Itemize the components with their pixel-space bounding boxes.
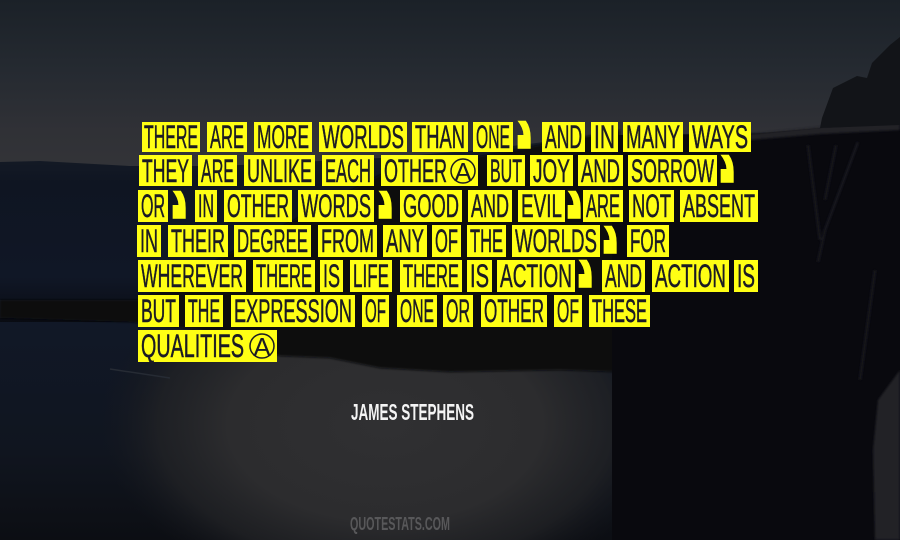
line 2: BUT [490, 153, 522, 189]
line 3: , [372, 185, 398, 287]
line 3: , [561, 185, 587, 287]
line 4: FOR [630, 223, 666, 259]
line 2: SORROW [631, 153, 714, 189]
line 4 [137, 220, 669, 322]
line 6: OF [557, 293, 579, 329]
line 5: THERE [256, 258, 312, 294]
line 6: ONE [400, 293, 434, 329]
line 1: ARE [210, 119, 244, 155]
line 6: OF [365, 293, 386, 329]
line 5: AND [605, 258, 642, 294]
line 3: EVIL [521, 188, 562, 224]
sky [0, 0, 900, 175]
line 2: THEY [142, 153, 189, 189]
line 6: OR [446, 293, 470, 329]
rock summit [820, 37, 900, 128]
icon: anarchy full stop: A [454, 157, 472, 187]
cliff ledge [750, 123, 900, 140]
line 7: QUALITIES [141, 328, 244, 364]
water reflection [90, 250, 650, 540]
icon: anarchy full stop: A [253, 332, 271, 362]
line 4: THE [470, 223, 503, 259]
line 5: , [572, 254, 598, 356]
line 6: EXPRESSION [234, 293, 352, 329]
line 1: THERE [144, 119, 198, 155]
line 4: ANY [386, 223, 424, 259]
lower right rock [873, 370, 900, 540]
line 2: AND [581, 153, 620, 189]
line 5: ACTION [655, 258, 726, 294]
line 3: GOOD [403, 188, 459, 224]
line 2: UNLIKE [247, 153, 312, 189]
line 2: ARE [201, 153, 234, 189]
line 1: THAN [415, 119, 465, 155]
line 4: WORLDS [515, 223, 597, 259]
line 3: OTHER [227, 188, 289, 224]
line 1 [142, 115, 751, 217]
line 3: ABSENT [683, 188, 755, 224]
line 6: THESE [592, 293, 647, 329]
line 2: EACH [325, 153, 371, 189]
line 3: ARE [586, 188, 620, 224]
line 1: , [511, 115, 537, 217]
line 5: LIFE [353, 258, 389, 294]
cliff [612, 124, 900, 540]
quote text block [137, 115, 758, 364]
line 2 [139, 149, 740, 251]
watermark: QUOTESTATS.COM [350, 514, 450, 534]
line 5: ACTION [500, 258, 572, 294]
line 5 [138, 254, 758, 356]
waterfall streaks [808, 142, 875, 380]
line 3: AND [471, 188, 509, 224]
line 3: OR [141, 188, 165, 224]
line 6: THE [188, 293, 220, 329]
water [0, 322, 640, 540]
line 3: , [166, 185, 192, 287]
line 2: JOY [533, 153, 570, 189]
line 4: OF [435, 223, 458, 259]
line 6: BUT [141, 293, 176, 329]
line 5: WHEREVER [141, 258, 243, 294]
line 3: NOT [632, 188, 671, 224]
water streak [110, 369, 170, 378]
line 6: OTHER [484, 293, 544, 329]
line 3 [138, 185, 758, 287]
line 4: , [597, 220, 623, 322]
line 3: IN [198, 188, 214, 224]
line 5: IS [323, 258, 340, 294]
line 4: DEGREE [237, 223, 308, 259]
line 1: IN [594, 119, 615, 155]
author attribution: JAMES STEPHENS [351, 399, 474, 425]
line 6 [138, 293, 650, 329]
line 4: FROM [321, 223, 374, 259]
line 5: THERE [403, 258, 459, 294]
line 1: MANY [626, 119, 680, 155]
line 5: IS [737, 258, 755, 294]
line 5: IS [470, 258, 489, 294]
distant hills [0, 130, 900, 340]
dark headland [0, 130, 620, 372]
line 1: MORE [257, 119, 309, 155]
line 4: THEIR [171, 223, 225, 259]
line 2: , [714, 149, 740, 251]
line 1: WORLDS [322, 119, 404, 155]
line 1: ONE [476, 119, 510, 155]
line 2: OTHER [384, 153, 447, 189]
line 3: WORDS [301, 188, 371, 224]
line 1: WAYS [692, 119, 748, 155]
line 4: IN [140, 223, 158, 259]
line 1: AND [545, 119, 582, 155]
